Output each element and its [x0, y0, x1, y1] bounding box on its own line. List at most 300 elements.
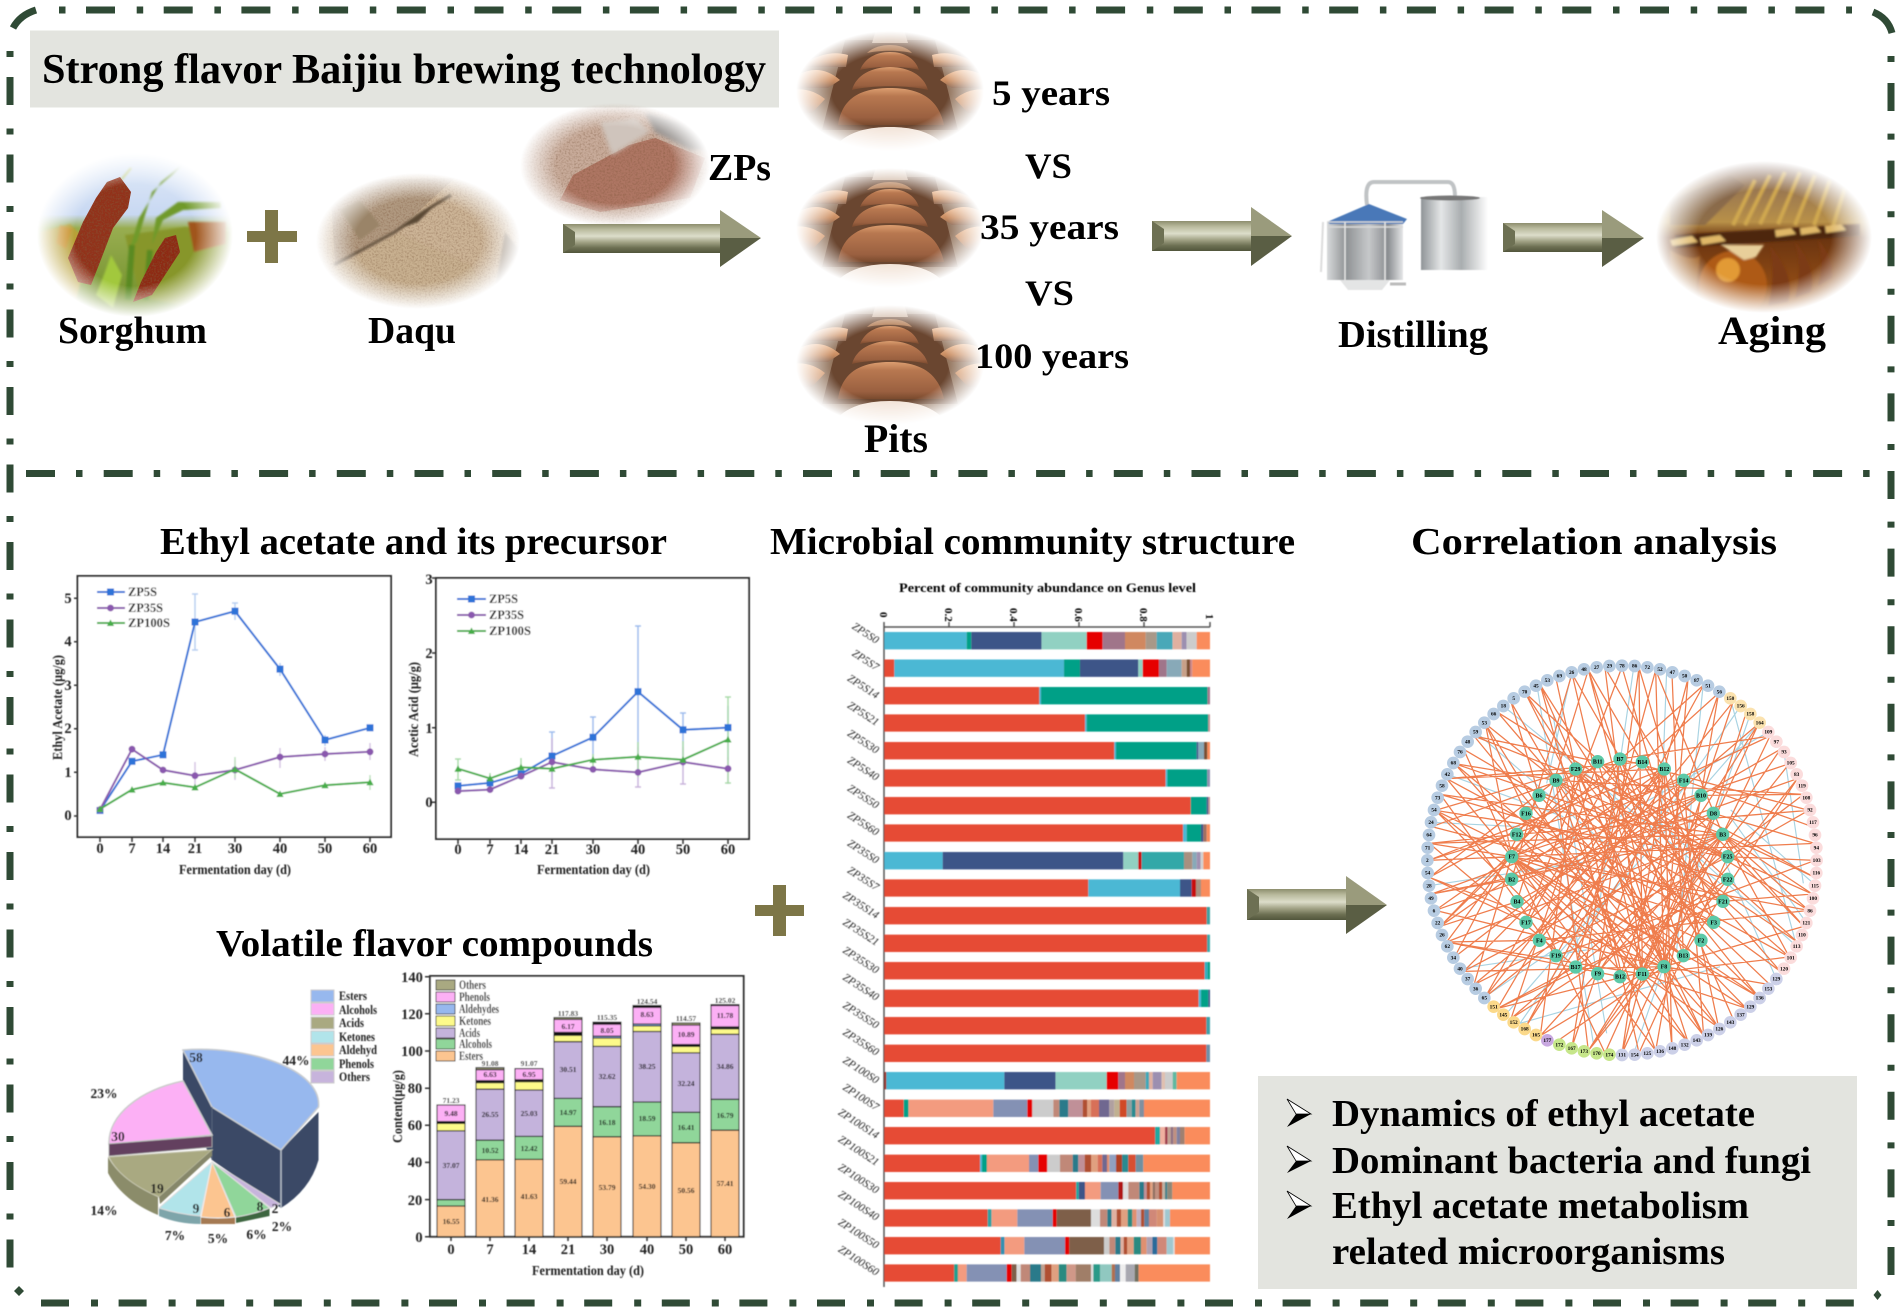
- ring of inner hub nodes: B10: [1696, 793, 1706, 799]
- 3D pie chart: volatile compound classes: 19: [150, 1181, 164, 1196]
- ring of outer nodes: 54: [1431, 808, 1437, 814]
- 3D pie chart: volatile compound classes: Phenols: [339, 1057, 374, 1071]
- line chart: ethyl acetate: 0: [64, 808, 72, 824]
- 3D pie chart: volatile compound classes: [90, 989, 377, 1246]
- line chart: acetic acid: 14: [514, 842, 528, 858]
- label: ZPs: ZPs: [708, 147, 771, 189]
- ring of outer nodes: 94: [1814, 845, 1819, 851]
- 3D pie chart: volatile compound classes: 2: [272, 1201, 279, 1216]
- ring of outer nodes: 119: [1798, 783, 1806, 789]
- ring of outer nodes: 34: [1451, 955, 1456, 961]
- 3D pie chart: volatile compound classes: 2%: [272, 1219, 292, 1234]
- stacked genus abundance chart: ZP5S50: [845, 782, 881, 812]
- stacked bar chart: content by fermentation day: 100: [401, 1044, 423, 1060]
- ring of outer nodes: 136: [1656, 1049, 1664, 1055]
- line chart: acetic acid: ZP100S: [489, 624, 531, 638]
- stacked bar chart: content by fermentation day: 16.79: [717, 1111, 734, 1120]
- stacked bar chart: content by fermentation day: 12.42: [521, 1144, 538, 1153]
- stacked genus abundance chart: ZP5S40: [845, 754, 881, 784]
- ring of outer nodes: 167: [1568, 1046, 1576, 1052]
- line chart: ethyl acetate: 14: [156, 841, 170, 857]
- ring of inner hub nodes: B4: [1514, 900, 1520, 906]
- stacked bar chart: content by fermentation day: Esters: [459, 1049, 483, 1063]
- label: Daqu: Daqu: [368, 310, 456, 352]
- stacked bar chart: content by fermentation day: 8.63: [640, 1010, 654, 1019]
- ring of outer nodes: 87: [1694, 678, 1700, 684]
- line chart: acetic acid: 1: [425, 721, 433, 737]
- ring of outer nodes: 126: [1715, 1027, 1724, 1033]
- stacked bar chart: content by fermentation day: 117.83: [558, 1009, 578, 1018]
- stacked bar chart: content by fermentation day: 6.63: [483, 1070, 497, 1079]
- stacked genus abundance chart: ZP35S7: [845, 864, 881, 894]
- photo: daqu: [318, 174, 518, 308]
- 3D pie chart: volatile compound classes: Aldehyd: [339, 1043, 377, 1057]
- ring of inner hub nodes: F7: [1508, 855, 1515, 861]
- stacked bar chart: content by fermentation day: 140: [401, 970, 423, 986]
- stacked genus abundance chart: ZP35S21: [841, 916, 881, 949]
- 3D pie chart: volatile compound classes: 6: [224, 1205, 231, 1220]
- line chart: ethyl acetate: [50, 576, 391, 877]
- stacked bar chart: content by fermentation day: 50: [679, 1242, 693, 1258]
- icon: bullet arrows: [1287, 1099, 1311, 1219]
- line chart: acetic acid: Acetic Acid (μg/g): [406, 662, 421, 757]
- label: 35 years: 35 years: [980, 207, 1119, 247]
- stacked bar chart: content by fermentation day: 120: [401, 1007, 423, 1023]
- label: VS second: VS: [1025, 273, 1074, 313]
- stacked bar chart: content by fermentation day: 59.44: [560, 1177, 577, 1186]
- conclusions panel: related microorganisms: [1332, 1231, 1725, 1273]
- stacked genus abundance chart: ZP35S30: [841, 944, 881, 977]
- ring of outer nodes: 110: [1798, 933, 1806, 939]
- line chart: ethyl acetate: 1: [64, 765, 72, 781]
- ring of outer nodes: 177: [1543, 1038, 1552, 1044]
- stacked genus abundance chart: ZP5S0: [850, 620, 881, 647]
- stacked bar chart: content by fermentation day: 54.30: [639, 1182, 656, 1191]
- ring of outer nodes: 26: [1439, 933, 1445, 939]
- stacked genus abundance chart: ZP5S7: [850, 647, 881, 674]
- stacked bar chart: content by fermentation day: 0: [415, 1230, 423, 1246]
- line chart: ethyl acetate: 7: [128, 841, 136, 857]
- stacked bar chart: content by fermentation day: 40: [640, 1242, 654, 1258]
- ring of outer nodes: 28: [1426, 883, 1432, 889]
- stacked genus abundance chart: 0: [877, 612, 889, 618]
- ring of outer nodes: 172: [1555, 1042, 1564, 1048]
- ring of outer nodes: 125: [1643, 1051, 1652, 1057]
- ring of outer nodes: 5: [1512, 696, 1515, 702]
- stacked bar chart: content by fermentation day: 32.62: [599, 1072, 616, 1081]
- ring of inner hub nodes: F25: [1723, 855, 1732, 861]
- ring of outer nodes: 86: [1632, 664, 1638, 670]
- ring of outer nodes: 83: [1794, 772, 1800, 778]
- stacked bar chart: content by fermentation day: 37.07: [443, 1161, 460, 1170]
- stacked genus abundance chart: ZP100S40: [836, 1188, 881, 1224]
- stacked genus abundance chart: ZP100S50: [836, 1216, 881, 1252]
- ring of outer nodes: 52: [1657, 667, 1663, 673]
- stacked bar chart: content by fermentation day: Fermentation day (d): [532, 1263, 644, 1278]
- 3D pie chart: volatile compound classes: Acids: [339, 1016, 364, 1030]
- stacked bar chart: content by fermentation day: [390, 970, 744, 1278]
- ring of inner hub nodes: F21: [1718, 899, 1728, 905]
- stacked bar chart: content by fermentation day: 10.52: [482, 1146, 499, 1155]
- stacked bar chart: content by fermentation day: 16.18: [599, 1118, 616, 1127]
- conclusions panel: [1258, 1076, 1857, 1289]
- stacked bar chart: content by fermentation day: 30.51: [560, 1065, 577, 1074]
- line chart: ethyl acetate: 30: [228, 841, 242, 857]
- stacked bar chart: content by fermentation day: Alcohols: [459, 1037, 492, 1051]
- arrow: to aging: [1503, 210, 1644, 267]
- 3D pie chart: volatile compound classes: 8: [257, 1199, 264, 1214]
- ring of outer nodes: 101: [1787, 955, 1795, 961]
- ring of outer nodes: 6: [1433, 908, 1436, 914]
- ring of outer nodes: 153: [1764, 986, 1773, 992]
- arrow: to distilling: [1152, 207, 1292, 266]
- line chart: ethyl acetate: ZP35S: [128, 601, 163, 615]
- 3D pie chart: volatile compound classes: 9: [193, 1201, 200, 1216]
- 3D pie chart: volatile compound classes: 14%: [90, 1203, 118, 1218]
- ring of outer nodes: [1421, 659, 1823, 1061]
- ring of outer nodes: 37: [1465, 977, 1471, 983]
- stacked bar chart: content by fermentation day: 30: [600, 1242, 614, 1258]
- stacked genus abundance chart: ZP100S30: [836, 1161, 881, 1197]
- ring of outer nodes: 49: [1428, 896, 1434, 902]
- ring of outer nodes: 64: [1426, 833, 1432, 839]
- ring of outer nodes: 22: [1435, 921, 1441, 927]
- stacked bar chart: content by fermentation day: Ketones: [459, 1014, 491, 1028]
- 3D pie chart: volatile compound classes: 58: [189, 1050, 203, 1065]
- stacked bar chart: content by fermentation day: Acids: [459, 1026, 480, 1040]
- ring of inner hub nodes: B12: [1615, 975, 1625, 981]
- stacked bar chart: content by fermentation day: 71.23: [443, 1096, 460, 1105]
- heading: Correlation analysis: Correlation analysis: [1411, 521, 1777, 563]
- ring of outer nodes: 105: [1787, 761, 1795, 767]
- ring of inner hub nodes: F11: [1638, 972, 1647, 978]
- stacked bar chart: content by fermentation day: 91.08: [482, 1059, 499, 1068]
- ring of inner hub nodes: B13: [1678, 954, 1688, 960]
- ring of inner hub nodes: B14: [1637, 760, 1647, 766]
- label: Aging: Aging: [1718, 308, 1826, 353]
- stacked bar chart: content by fermentation day: 21: [561, 1242, 575, 1258]
- stacked bar chart: content by fermentation day: 0: [447, 1242, 455, 1258]
- stacked bar chart: content by fermentation day: 26.55: [482, 1110, 499, 1119]
- line chart: ethyl acetate: 0: [96, 841, 104, 857]
- line chart: acetic acid: 21: [545, 842, 559, 858]
- ring of inner hub nodes: F9: [1594, 972, 1601, 978]
- stacked genus abundance chart: ZP100S14: [836, 1106, 881, 1142]
- ring of outer nodes: 36: [1473, 986, 1479, 992]
- ring of outer nodes: 86: [1807, 908, 1813, 914]
- ring of outer nodes: 143: [1726, 1020, 1735, 1026]
- stacked bar chart: content by fermentation day: 9.48: [444, 1109, 458, 1118]
- stacked bar chart: content by fermentation day: 14.97: [560, 1108, 577, 1117]
- line chart: acetic acid: 60: [721, 842, 735, 858]
- ring of outer nodes: 27: [1594, 665, 1600, 671]
- ring of outer nodes: 165: [1532, 1033, 1540, 1039]
- stacked genus abundance chart: Percent of community abundance on Genus level: [899, 580, 1196, 595]
- stacked genus abundance chart: [836, 580, 1215, 1287]
- 3D pie chart: volatile compound classes: Esters: [339, 989, 367, 1003]
- stacked genus abundance chart: ZP35S0: [845, 837, 881, 867]
- ring of outer nodes: 96: [1812, 833, 1818, 839]
- 3D pie chart: volatile compound classes: Others: [339, 1070, 370, 1084]
- ring of outer nodes: 173: [1580, 1049, 1588, 1055]
- ring of outer nodes: 78: [1619, 663, 1625, 669]
- stacked bar chart: content by fermentation day: 34.86: [717, 1062, 734, 1071]
- ring of outer nodes: 115: [1811, 883, 1819, 889]
- stacked bar chart: content by fermentation day: 6.17: [561, 1022, 575, 1031]
- ring of outer nodes: 116: [1812, 871, 1821, 877]
- ring of outer nodes: 120: [1780, 966, 1788, 972]
- ring of inner hub nodes: B6: [1536, 793, 1542, 799]
- section divider: [26, 470, 1886, 477]
- ring of outer nodes: 29: [1607, 664, 1612, 670]
- stacked bar chart: content by fermentation day: 125.02: [715, 996, 736, 1005]
- stacked bar chart: content by fermentation day: 115.35: [597, 1013, 617, 1022]
- stacked bar chart: content by fermentation day: 8.05: [600, 1026, 614, 1035]
- line chart: acetic acid: 0: [454, 842, 462, 858]
- line chart: ethyl acetate: 3: [64, 678, 72, 694]
- ring of inner hub nodes: F4: [1536, 938, 1543, 944]
- ring of outer nodes: 71: [1425, 845, 1431, 851]
- stacked bar chart: content by fermentation day: 91.07: [521, 1059, 538, 1068]
- icon: distiller: [1321, 182, 1488, 290]
- ring of inner hub nodes: F12: [1512, 832, 1521, 838]
- photo: 100-year pit: [788, 299, 992, 434]
- ring of outer nodes: 100: [1809, 896, 1817, 902]
- ring of outer nodes: 72: [1645, 665, 1650, 671]
- label: Distilling: Distilling: [1338, 314, 1488, 356]
- ring of outer nodes: 51: [1705, 683, 1711, 689]
- ring of outer nodes: 136: [1756, 996, 1764, 1002]
- stacked genus abundance chart: 0.6: [1072, 608, 1084, 622]
- stacked bar chart: content by fermentation day: Content(μg/g): [390, 1070, 405, 1143]
- ring of outer nodes: 148: [1668, 1046, 1677, 1052]
- ring of outer nodes: 164: [1756, 720, 1764, 726]
- line chart: ethyl acetate: 5: [64, 591, 72, 607]
- stacked genus abundance chart: ZP100S60: [836, 1243, 881, 1279]
- label: 100 years: 100 years: [975, 336, 1129, 376]
- ring of outer nodes: 54: [1425, 871, 1431, 877]
- stacked bar chart: content by fermentation day: 40: [408, 1155, 422, 1171]
- stacked genus abundance chart: ZP100S21: [836, 1133, 881, 1169]
- ring of outer nodes: 48: [1465, 739, 1471, 745]
- icon: plus: [247, 210, 297, 263]
- stacked genus abundance chart: ZP35S14: [841, 889, 881, 922]
- stacked genus abundance chart: ZP5S60: [845, 809, 881, 839]
- stacked genus abundance chart: ZP100S0: [841, 1054, 881, 1087]
- heading: Ethyl acetate and its precursor: Ethyl acetate and its precursor: [160, 521, 667, 563]
- ring of outer nodes: 53: [1545, 678, 1550, 684]
- 3D pie chart: volatile compound classes: Ketones: [339, 1030, 375, 1044]
- ring of outer nodes: 93: [1781, 750, 1787, 756]
- stacked bar chart: content by fermentation day: 10.89: [678, 1030, 695, 1039]
- stacked genus abundance chart: 1: [1203, 614, 1215, 620]
- ring of outer nodes: 48: [1581, 667, 1587, 673]
- photo: sorghum: [38, 161, 232, 316]
- ring of inner hub nodes: F8: [1661, 965, 1667, 971]
- title banner: [30, 30, 779, 108]
- ring of inner hub nodes: B12: [1659, 767, 1669, 773]
- ring of outer nodes: 56: [1717, 689, 1722, 695]
- 3D pie chart: volatile compound classes: 5%: [208, 1231, 228, 1246]
- ring of inner hub nodes: F17: [1521, 920, 1531, 926]
- line chart: ethyl acetate: 50: [318, 841, 332, 857]
- ring of outer nodes: 131: [1618, 1053, 1626, 1059]
- stacked genus abundance chart: ZP100S7: [841, 1081, 881, 1114]
- ring of outer nodes: 145: [1499, 1012, 1508, 1018]
- conclusions panel: Dominant bacteria and fungi: [1332, 1140, 1811, 1182]
- ring of inner hub nodes: B17: [1571, 965, 1581, 971]
- ring of inner hub nodes: B11: [1593, 760, 1602, 766]
- ring of inner hub nodes: F2: [1698, 938, 1704, 944]
- ring of outer nodes: 42: [1445, 772, 1450, 778]
- ring of outer nodes: 58: [1439, 783, 1445, 789]
- ring of outer nodes: 103: [1813, 858, 1821, 864]
- stacked bar chart: content by fermentation day: 57.41: [717, 1179, 734, 1188]
- ring of outer nodes: 40: [1457, 966, 1463, 972]
- ring of outer nodes: 2: [1426, 858, 1429, 864]
- ring of inner hub nodes: F22: [1723, 877, 1732, 883]
- stacked bar chart: content by fermentation day: 50.56: [678, 1186, 695, 1195]
- arrow: to correlation network: [1247, 876, 1387, 934]
- ring of outer nodes: 24: [1428, 820, 1434, 826]
- ring of outer nodes: 117: [1809, 820, 1817, 826]
- line chart: acetic acid: 3: [425, 572, 433, 588]
- ring of outer nodes: 26: [1569, 670, 1575, 676]
- ring of outer nodes: 73: [1435, 795, 1441, 801]
- ring of inner hub nodes: F3: [1710, 920, 1717, 926]
- ring of outer nodes: 92: [1807, 808, 1813, 814]
- ring of outer nodes: 174: [1605, 1052, 1614, 1058]
- ring of inner hub nodes: B3: [1719, 832, 1726, 838]
- line chart: acetic acid: ZP5S: [489, 592, 518, 606]
- heading: Volatile flavor compounds: Volatile flavor compounds: [216, 923, 653, 965]
- stacked bar chart: content by fermentation day: 114.57: [676, 1014, 696, 1023]
- line chart: acetic acid: 2: [425, 646, 433, 662]
- ring of outer nodes: 129: [1772, 977, 1781, 983]
- ring of inner hub nodes: D8: [1710, 811, 1717, 817]
- stacked bar chart: content by fermentation day: 124.54: [637, 997, 658, 1006]
- ring of outer nodes: 18: [1501, 704, 1506, 710]
- stacked genus abundance chart: ZP35S40: [841, 971, 881, 1004]
- 3D pie chart: volatile compound classes: 6%: [246, 1227, 267, 1242]
- ring of inner hub nodes: F29: [1571, 767, 1580, 773]
- ring of outer nodes: 97: [1774, 739, 1779, 745]
- photo: 5-year pit: [788, 25, 992, 160]
- line chart: ethyl acetate: ZP100S: [128, 616, 170, 630]
- stacked bar chart: content by fermentation day: 11.78: [717, 1011, 733, 1020]
- ring of inner hub nodes: B2: [1508, 877, 1515, 883]
- label: Pits: Pits: [864, 416, 928, 461]
- line chart: ethyl acetate: 21: [188, 841, 202, 857]
- label: Sorghum: Sorghum: [58, 310, 207, 352]
- stacked genus abundance chart: 0.8: [1137, 608, 1149, 622]
- stacked bar chart: content by fermentation day: 7: [486, 1242, 494, 1258]
- stacked bar chart: content by fermentation day: 41.36: [482, 1195, 499, 1204]
- heading: Microbial community structure: Microbial community structure: [770, 521, 1295, 563]
- 3D pie chart: volatile compound classes: 23%: [90, 1086, 118, 1101]
- ring of inner hub nodes: F16: [1521, 811, 1531, 817]
- stacked bar chart: content by fermentation day: Phenols: [459, 990, 490, 1004]
- ring of inner hub nodes: F19: [1551, 954, 1561, 960]
- ring of outer nodes: 129: [1746, 1004, 1755, 1010]
- stacked bar chart: content by fermentation day: 60: [408, 1118, 422, 1134]
- ring of inner hub nodes: [1505, 752, 1734, 983]
- ring of outer nodes: 65: [1482, 996, 1487, 1002]
- stacked bar chart: content by fermentation day: 41.63: [521, 1192, 538, 1201]
- 3D pie chart: volatile compound classes: Alcohols: [339, 1003, 377, 1017]
- ring of outer nodes: 62: [1445, 944, 1450, 950]
- ring of outer nodes: 156: [1737, 704, 1745, 710]
- ring of inner hub nodes: B7: [1617, 757, 1623, 763]
- ring of outer nodes: 168: [1521, 1027, 1529, 1033]
- title banner: Strong flavor Baijiu brewing technology: [42, 47, 766, 93]
- 3D pie chart: volatile compound classes: 30: [111, 1129, 125, 1144]
- stacked bar chart: content by fermentation day: 25.03: [521, 1109, 538, 1118]
- conclusions panel: Dynamics of ethyl acetate: [1332, 1093, 1755, 1135]
- line chart: acetic acid: 30: [586, 842, 600, 858]
- stacked genus abundance chart: 0.2: [942, 608, 954, 622]
- stacked genus abundance chart: ZP35S60: [841, 1026, 881, 1059]
- arrow: to pits: [563, 210, 761, 267]
- line chart: ethyl acetate: 60: [363, 841, 377, 857]
- stacked bar chart: content by fermentation day: 16.41: [678, 1123, 695, 1132]
- ring of outer nodes: 151: [1490, 1004, 1498, 1010]
- ring of outer nodes: 158: [1746, 712, 1755, 718]
- line chart: ethyl acetate: 40: [273, 841, 287, 857]
- 3D pie chart: volatile compound classes: 7%: [165, 1228, 185, 1243]
- ring of outer nodes: 59: [1473, 730, 1479, 736]
- stacked bar chart: content by fermentation day: 38.25: [639, 1062, 656, 1071]
- label: 5 years: 5 years: [992, 73, 1110, 113]
- line chart: ethyl acetate: Fermentation day (d): [179, 862, 291, 877]
- stacked genus abundance chart: ZP5S14: [845, 672, 881, 702]
- stacked bar chart: content by fermentation day: 6.95: [522, 1070, 536, 1079]
- ring of outer nodes: 45: [1533, 683, 1539, 689]
- conclusions panel: Ethyl acetate metabolism: [1332, 1185, 1749, 1227]
- ring of outer nodes: 69: [1557, 674, 1562, 680]
- photo: 35-year pit: [788, 162, 992, 297]
- photo: aging cellar: [1655, 160, 1875, 319]
- ring of outer nodes: 68: [1451, 761, 1456, 767]
- correlation network diagram: [1421, 659, 1823, 1061]
- ring of outer nodes: 137: [1737, 1012, 1745, 1018]
- line chart: acetic acid: ZP35S: [489, 608, 524, 622]
- line chart: acetic acid: Fermentation day (d): [537, 862, 650, 877]
- line chart: acetic acid: 7: [486, 842, 494, 858]
- ring of inner hub nodes: F14: [1679, 778, 1688, 784]
- ring of outer nodes: 66: [1491, 712, 1497, 718]
- line chart: acetic acid: [406, 572, 749, 877]
- ring of outer nodes: 154: [1631, 1052, 1639, 1058]
- ring of outer nodes: 139: [1704, 1033, 1712, 1039]
- line chart: acetic acid: 40: [631, 842, 645, 858]
- ring of outer nodes: 70: [1522, 689, 1528, 695]
- stacked bar chart: content by fermentation day: 16.55: [443, 1217, 460, 1226]
- line chart: acetic acid: 0: [425, 795, 433, 811]
- line chart: ethyl acetate: ZP5S: [128, 585, 157, 599]
- 3D pie chart: volatile compound classes: 44%: [282, 1053, 310, 1068]
- ring of outer nodes: 132: [1681, 1042, 1689, 1048]
- stacked genus abundance chart: ZP5S21: [845, 699, 881, 729]
- label: VS: VS: [1025, 146, 1072, 186]
- icon: second plus: [755, 885, 804, 936]
- stacked bar chart: content by fermentation day: 18.59: [639, 1114, 656, 1123]
- ring of outer nodes: 47: [1670, 670, 1675, 676]
- ring of outer nodes: 76: [1457, 750, 1463, 756]
- ring of outer nodes: 152: [1510, 1020, 1518, 1026]
- photo: ZPs grains: [522, 105, 708, 224]
- stacked bar chart: content by fermentation day: Others: [459, 978, 486, 992]
